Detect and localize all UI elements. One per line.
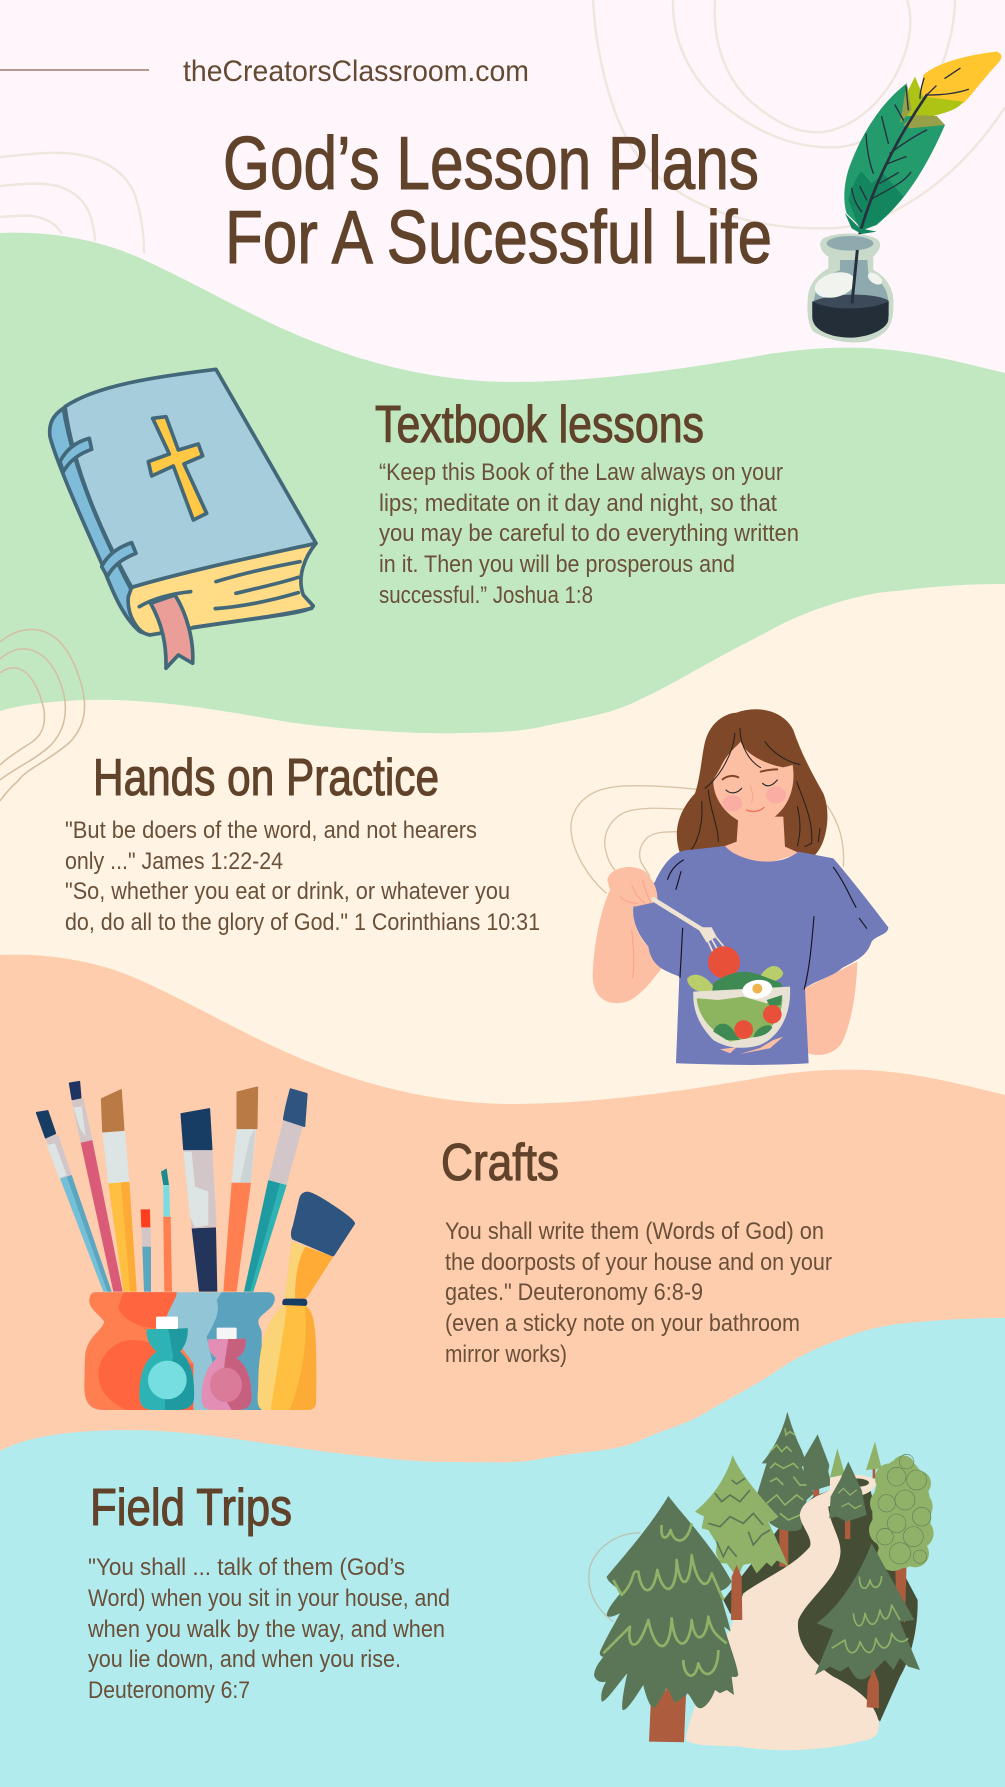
heading: crafts: Crafts bbox=[441, 1134, 559, 1192]
blue shirt bbox=[633, 846, 888, 1065]
text: deuteronomy 6:7 quote: "You shall ... talk of them (God’s bbox=[88, 1554, 405, 1581]
distant light trees bbox=[830, 1442, 882, 1478]
brush: small teal tip bbox=[161, 1168, 172, 1292]
tomato on fork bbox=[708, 946, 740, 978]
header rule bbox=[0, 69, 149, 71]
text: deuteronomy 6:7 quote: Deuteronomy 6:7 bbox=[88, 1677, 250, 1704]
text: deuteronomy 6:7 quote: Word) when you sit in your house, and bbox=[88, 1585, 450, 1612]
dark forest floor bbox=[723, 1476, 918, 1722]
hair lines bbox=[692, 728, 820, 849]
text: deuteronomy 6:8-9 quote: (even a sticky note on your bathroom bbox=[445, 1310, 800, 1337]
egg bbox=[741, 978, 773, 1001]
small mid tree bbox=[829, 1462, 867, 1539]
book pages bbox=[128, 543, 316, 635]
brush: green handle bbox=[244, 1089, 307, 1292]
brush: thin teal handle bbox=[37, 1111, 112, 1292]
decorative left swirl bbox=[0, 630, 85, 801]
heading: hands on practice: Hands on Practice bbox=[93, 749, 439, 807]
text: deuteronomy 6:8-9 quote: the doorposts of your house and on your bbox=[445, 1249, 832, 1276]
text: joshua quote: in it. Then you will be prosperous and bbox=[379, 551, 735, 578]
hand fingers bbox=[607, 867, 657, 907]
heading: field trips: Field Trips bbox=[90, 1479, 292, 1537]
text: joshua quote: successful.” Joshua 1:8 bbox=[379, 582, 593, 609]
title: God’s Lesson Plans bbox=[223, 121, 759, 205]
text: james and corinthians quotes bbox=[65, 817, 540, 936]
neck bbox=[723, 817, 800, 867]
panel: field trips background wave bbox=[0, 1318, 1005, 1787]
text: joshua quote: you may be careful to do everything written bbox=[379, 520, 799, 547]
large brush bbox=[258, 1194, 353, 1410]
right arm bbox=[777, 962, 857, 1055]
fingers under bowl bbox=[720, 1037, 783, 1054]
brush: small red tip bbox=[141, 1209, 151, 1292]
pink bottle bbox=[202, 1328, 252, 1410]
website name: theCreatorsClassroom.com bbox=[183, 55, 529, 88]
teal bottle bbox=[139, 1317, 194, 1410]
text: deuteronomy 6:7 quote bbox=[87, 1554, 450, 1704]
front right pine bbox=[815, 1543, 920, 1708]
brush: navy flat bbox=[181, 1109, 217, 1292]
cherry tomatoes bbox=[763, 1005, 782, 1024]
text: joshua quote: “Keep this Book of the Law always on your bbox=[379, 459, 783, 486]
illustration: woman eating salad bbox=[571, 709, 888, 1065]
illustration: forest path bbox=[589, 1412, 934, 1750]
panel: crafts background wave bbox=[0, 955, 1005, 1787]
illustration: paint brushes in jar bbox=[37, 1082, 353, 1410]
decorative top right rings bbox=[0, 0, 1005, 253]
left arm bbox=[593, 867, 662, 1003]
hair bbox=[677, 709, 827, 855]
text: joshua quote bbox=[379, 459, 799, 609]
title: For A Sucessful Life bbox=[225, 195, 772, 279]
text: james and corinthians quotes: do, do all to the glory of God." 1 Corinthians 10:31 bbox=[65, 909, 540, 936]
text: deuteronomy 6:8-9 quote bbox=[445, 1218, 832, 1368]
text: james and corinthians quotes: only ..." James 1:22-24 bbox=[65, 848, 283, 875]
brush: orange handle bbox=[223, 1087, 257, 1292]
winding path bbox=[686, 1475, 879, 1750]
fork bbox=[653, 899, 723, 952]
light green pine bbox=[695, 1455, 788, 1620]
text: deuteronomy 6:8-9 quote: You shall write them (Words of God) on bbox=[445, 1218, 824, 1245]
brush: pink handle bbox=[70, 1082, 123, 1292]
large front pine bbox=[594, 1496, 738, 1742]
icon: bible with cross bbox=[50, 369, 316, 668]
text: deuteronomy 6:8-9 quote: gates." Deuteronomy 6:8-9 bbox=[445, 1279, 703, 1306]
salad leaves bbox=[687, 975, 717, 1000]
small back tree bbox=[803, 1434, 832, 1497]
jar bbox=[84, 1292, 275, 1410]
text: deuteronomy 6:7 quote: when you walk by the way, and when bbox=[87, 1616, 445, 1643]
cross bbox=[148, 417, 207, 520]
back tree bbox=[757, 1412, 814, 1567]
heading: textbook lessons: Textbook lessons bbox=[375, 396, 704, 454]
text: deuteronomy 6:8-9 quote: mirror works) bbox=[445, 1341, 567, 1368]
swirl behind woman bbox=[571, 786, 844, 893]
brush: yellow handle bbox=[102, 1090, 137, 1292]
decorative swirl behind trees bbox=[589, 1533, 640, 1622]
panel: hands on practice background wave bbox=[0, 584, 1005, 1787]
book clasps bbox=[60, 438, 92, 472]
round bush tree bbox=[869, 1454, 934, 1623]
book spine bbox=[50, 408, 150, 635]
bookmark ribbon bbox=[151, 595, 193, 668]
text: james and corinthians quotes: "But be doers of the word, and not hearers bbox=[65, 817, 477, 844]
title bbox=[223, 121, 772, 279]
face bbox=[713, 742, 793, 826]
text: joshua quote: lips; meditate on it day and night, so that bbox=[379, 490, 777, 517]
glass bowl bbox=[693, 987, 790, 1048]
icon: quill feather in ink bottle bbox=[807, 52, 1001, 342]
book cover bbox=[65, 369, 316, 587]
text: james and corinthians quotes: "So, whether you eat or drink, or whatever you bbox=[65, 878, 510, 905]
text: deuteronomy 6:7 quote: you lie down, and when you rise. bbox=[88, 1646, 401, 1673]
